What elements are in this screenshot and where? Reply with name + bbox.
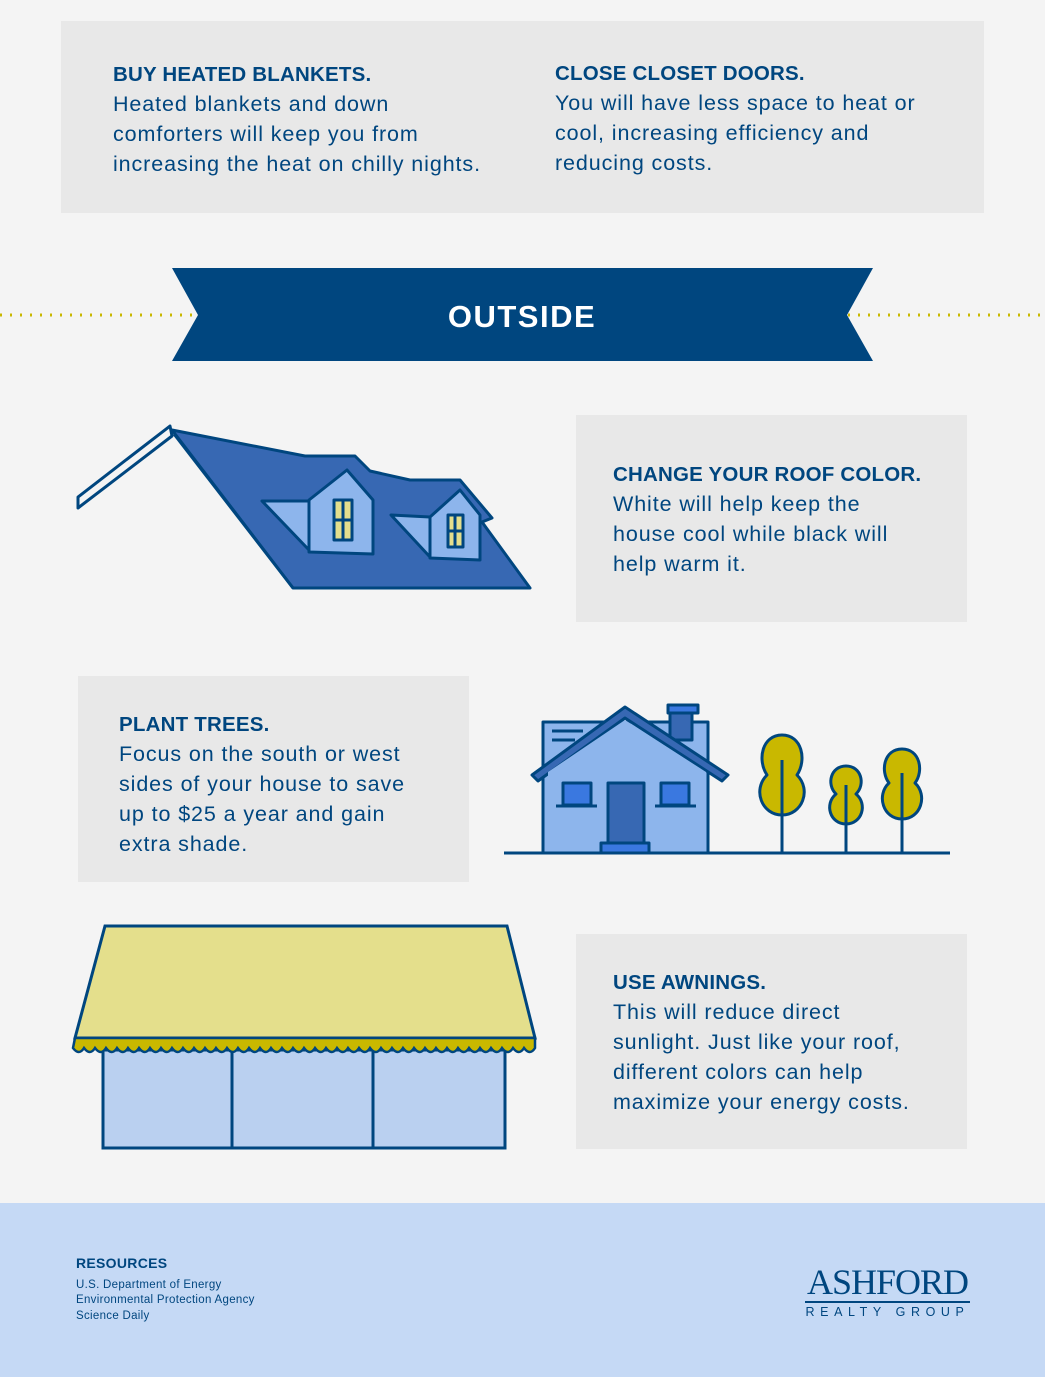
text: buy heated blankets: comforters will keep you from (113, 122, 419, 146)
text: plant trees: PLANT TREES. (119, 713, 269, 736)
panel: top tips (61, 21, 984, 213)
banner: outside: OUTSIDE (448, 299, 596, 334)
text: use awnings: different colors can help (613, 1060, 863, 1084)
text: plant trees: sides of your house to save (119, 772, 405, 796)
text: close closet doors: cool, increasing efficiency and (555, 121, 869, 145)
text: change roof color: help warm it. (613, 552, 747, 576)
logo (805, 1262, 970, 1319)
text: plant trees (119, 713, 405, 856)
panel: plant trees (78, 676, 469, 882)
text: use awnings: USE AWNINGS. (613, 971, 766, 994)
panel: roof color (576, 415, 967, 622)
text: use awnings: maximize your energy costs. (613, 1090, 910, 1114)
resources: Science Daily (76, 1310, 150, 1322)
text: use awnings (613, 971, 910, 1114)
text: close closet doors: reducing costs. (555, 151, 713, 175)
text: close closet doors: You will have less space to heat or (555, 91, 916, 115)
text: use awnings: This will reduce direct (613, 1000, 840, 1024)
resources: Environmental Protection Agency (76, 1294, 255, 1306)
text: close closet doors (555, 62, 916, 175)
text: change roof color: White will help keep the (613, 492, 860, 516)
panel: awnings (576, 934, 967, 1149)
text: buy heated blankets (113, 63, 481, 176)
text: close closet doors: CLOSE CLOSET DOORS. (555, 62, 805, 85)
text: change roof color (613, 463, 921, 576)
text: plant trees: extra shade. (119, 832, 248, 856)
text: change roof color: CHANGE YOUR ROOF COLOR. (613, 463, 921, 486)
text: plant trees: up to $25 a year and gain (119, 802, 385, 826)
text: buy heated blankets: Heated blankets and down (113, 92, 389, 116)
text: use awnings: sunlight. Just like your roof, (613, 1030, 901, 1054)
resources: RESOURCES (76, 1255, 167, 1271)
logo: REALTY GROUP (806, 1305, 969, 1319)
text: buy heated blankets: increasing the heat on chilly nights. (113, 152, 481, 176)
footer (0, 1203, 1045, 1377)
text: plant trees: Focus on the south or west (119, 742, 401, 766)
logo: ASHFORD (807, 1262, 968, 1302)
resources (76, 1255, 255, 1322)
resources: U.S. Department of Energy (76, 1278, 222, 1290)
text: buy heated blankets: BUY HEATED BLANKETS. (113, 63, 371, 86)
text: change roof color: house cool while black will (613, 522, 888, 546)
